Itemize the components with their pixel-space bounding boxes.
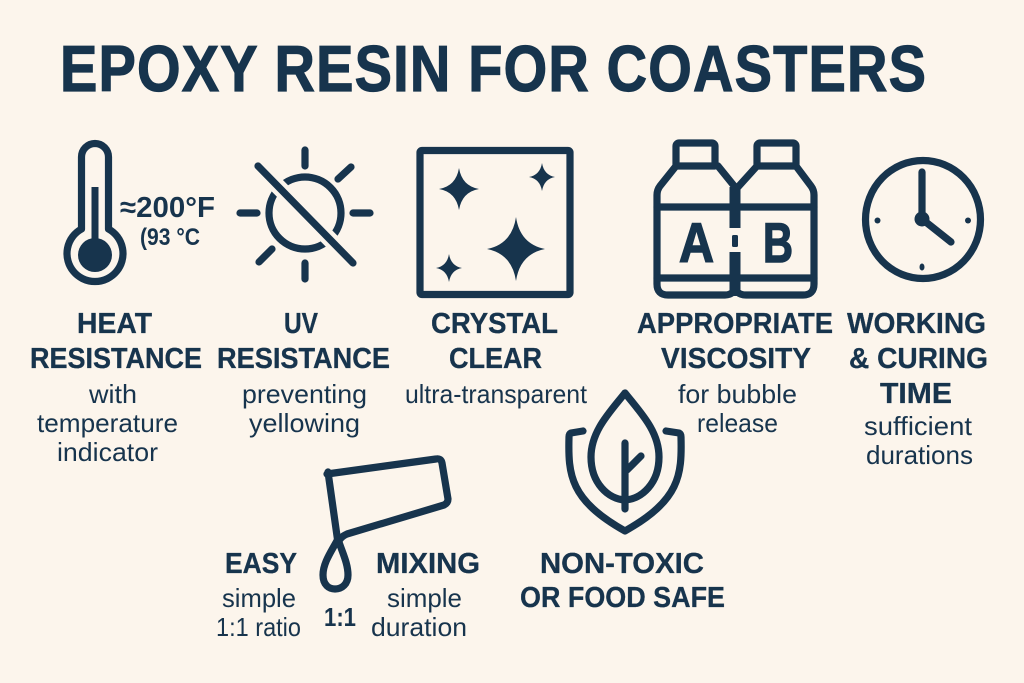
icon: A and B bottles: A — [679, 211, 714, 274]
heading: heat resistance — [30, 308, 202, 375]
description: heat resistance: temperature — [37, 408, 178, 438]
heading: uv resistance: UV — [284, 308, 319, 340]
panel: uv resistance — [217, 150, 390, 438]
heading: appropriate viscosity: VISCOSITY — [661, 343, 811, 375]
description: heat resistance: indicator — [57, 437, 158, 467]
heading: easy: EASY — [225, 548, 297, 580]
description: uv resistance: preventing — [242, 379, 367, 409]
heading: non-toxic or food safe — [520, 548, 725, 614]
heading: heat resistance: RESISTANCE — [30, 343, 202, 375]
icon: A and B bottles: B — [763, 211, 793, 274]
heading: non-toxic or food safe: NON-TOXIC — [540, 548, 704, 580]
icon: A and B bottles — [657, 143, 814, 296]
icon: leaf on shield — [569, 393, 681, 531]
description: working and curing time — [864, 411, 973, 470]
description: appropriate viscosity — [678, 379, 797, 438]
icon: square with sparkles — [420, 150, 570, 294]
heading: working and curing time — [847, 308, 988, 410]
panel: non-toxic or food safe — [520, 393, 725, 614]
heading: uv resistance — [217, 308, 390, 375]
description: working and curing time: sufficient — [864, 411, 973, 441]
panel: easy mixing — [216, 459, 480, 642]
panel: crystal clear — [405, 150, 588, 409]
heading: crystal clear — [431, 308, 558, 375]
heading: heat resistance: HEAT — [77, 308, 152, 340]
description: simple duration — [371, 583, 467, 642]
temperature indicator — [120, 192, 215, 251]
description: uv resistance: yellowing — [249, 408, 360, 438]
icon: pouring cup with drop — [323, 459, 448, 589]
heading: appropriate viscosity — [637, 308, 833, 375]
description: uv resistance — [242, 379, 367, 438]
description: simple ratio — [216, 583, 301, 642]
heading: working and curing time: TIME — [880, 378, 952, 410]
title: EPOXY RESIN FOR COASTERS — [60, 32, 926, 105]
heading: working and curing time: & CURING — [849, 343, 988, 375]
heading: crystal clear: CLEAR — [449, 343, 542, 375]
description: heat resistance — [37, 379, 178, 467]
description: simple ratio: simple — [222, 583, 296, 613]
description: heat resistance: with — [88, 379, 137, 409]
description: simple duration: duration — [371, 612, 467, 642]
heading: non-toxic or food safe: OR FOOD SAFE — [520, 582, 725, 614]
description: simple duration: simple — [387, 583, 462, 613]
heading: uv resistance: RESISTANCE — [217, 343, 390, 375]
heading: crystal clear: CRYSTAL — [431, 308, 558, 340]
icon: clock — [866, 160, 980, 278]
panel: heat resistance — [30, 144, 215, 467]
heading: appropriate viscosity: APPROPRIATE — [637, 308, 833, 340]
heading: mixing: MIXING — [376, 548, 480, 580]
icon: crossed-out sun — [240, 150, 370, 279]
panel: working and curing time — [847, 160, 988, 470]
temperature indicator: (93 °C — [140, 224, 200, 251]
ratio label: 1:1 — [324, 602, 356, 632]
description: crystal clear: ultra-transparent — [405, 379, 588, 409]
description: appropriate viscosity: for bubble — [678, 379, 797, 409]
heading: working and curing time: WORKING — [847, 308, 986, 340]
description: appropriate viscosity: release — [697, 408, 778, 438]
panel: appropriate viscosity — [637, 143, 833, 438]
description: working and curing time: durations — [866, 440, 973, 470]
temperature indicator: ≈200°F — [120, 192, 215, 224]
description: simple ratio: 1:1 ratio — [216, 612, 301, 642]
icon: thermometer — [67, 144, 123, 282]
